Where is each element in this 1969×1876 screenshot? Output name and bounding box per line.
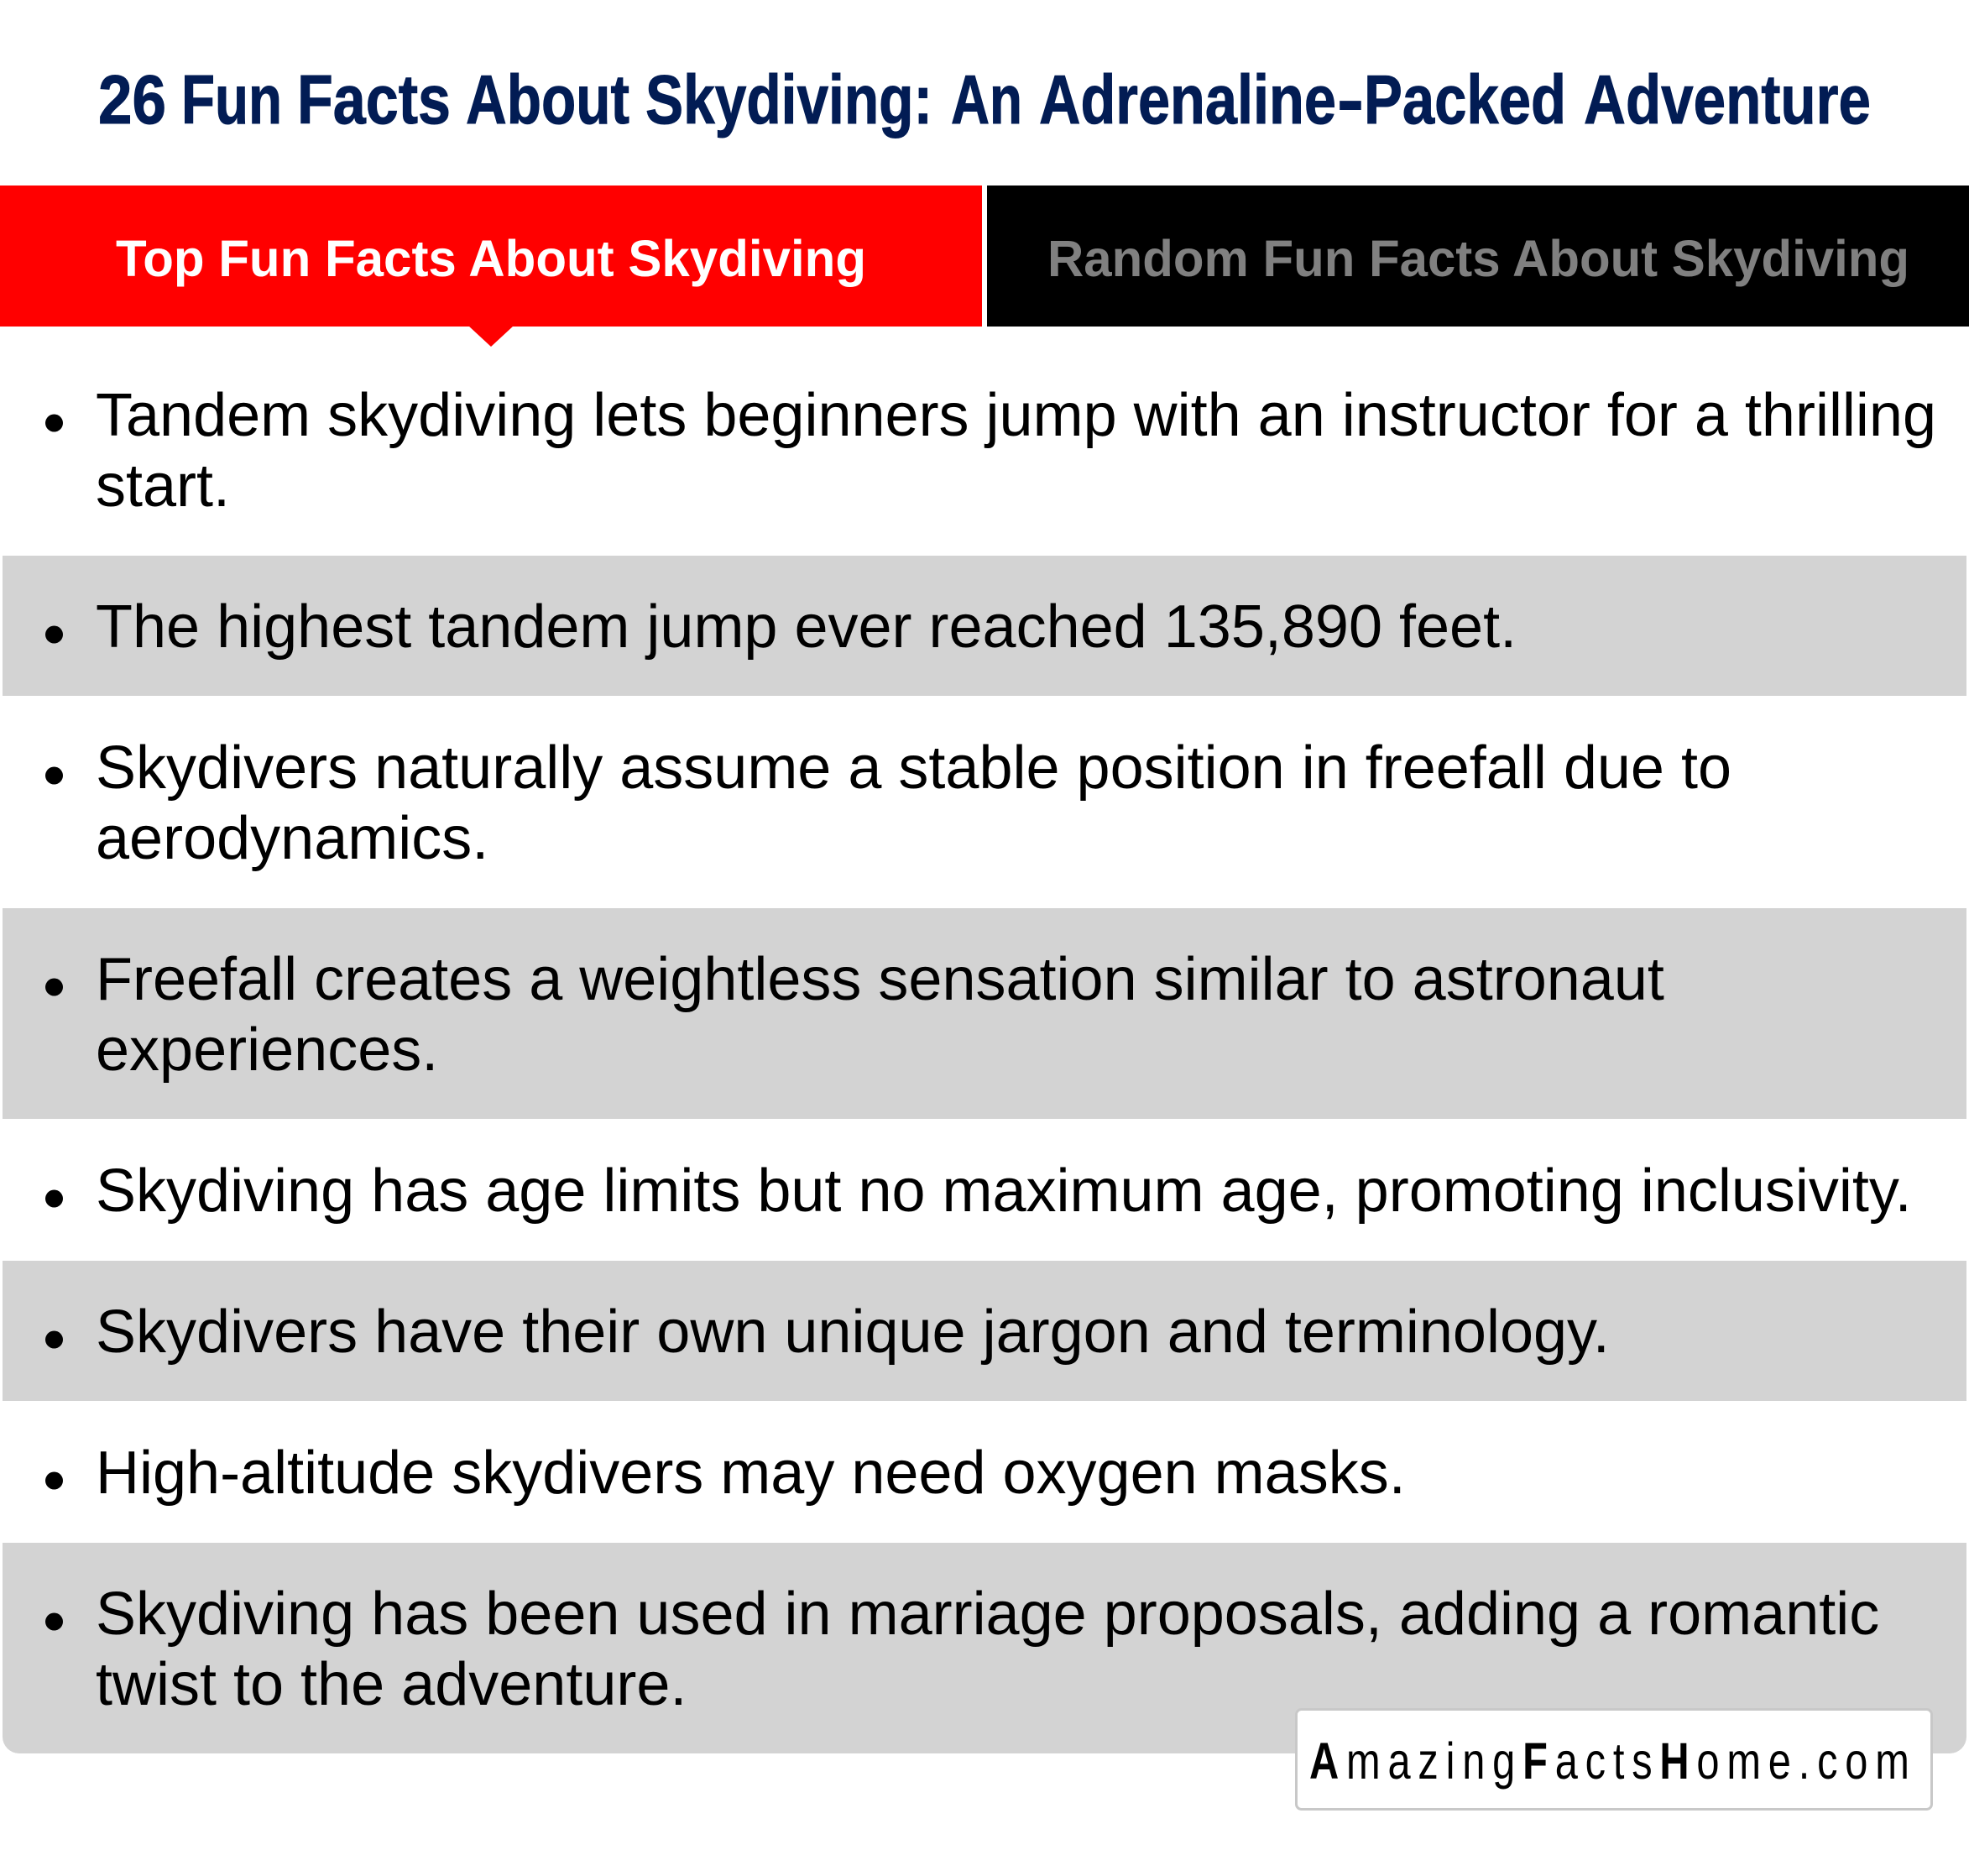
fact row 6: Skydivers have their own unique jargon and terminology. <box>96 1299 1610 1366</box>
tab: random fun facts (inactive) <box>987 186 1969 327</box>
title: - <box>1337 60 1364 138</box>
title: About <box>466 60 629 138</box>
fact row 4 <box>3 908 1966 1119</box>
fact row 8: Skydiving has been used in marriage proposals, adding a romantic <box>96 1581 1879 1648</box>
fact row 1 <box>45 382 1936 520</box>
fact row 3 <box>45 734 1731 872</box>
tab: top fun facts (active): Top Fun Facts About Skydiving <box>116 230 866 287</box>
fact row 4: experiences. <box>96 1016 438 1084</box>
title: An <box>951 60 1022 138</box>
watermark: AmazingFactsHome.com <box>1296 1709 1932 1810</box>
fact row 7: High-altitude skydivers may need oxygen masks. <box>96 1440 1406 1507</box>
title: Facts <box>297 60 451 138</box>
watermark: AmazingFactsHome.com: AmazingFactsHome.com <box>1309 1732 1917 1790</box>
title: Packed <box>1364 60 1566 138</box>
title: Adrenaline <box>1039 60 1336 138</box>
fact row 8: twist to the adventure. <box>96 1651 687 1718</box>
fact row 3: Skydivers naturally assume a stable position in freefall due to <box>96 734 1731 802</box>
fact row 2: The highest tandem jump ever reached 135,890 feet. <box>96 593 1517 661</box>
fact row 5: Skydiving has age limits but no maximum age, promoting inclusivity. <box>96 1157 1912 1225</box>
fact row 1: Tandem skydiving lets beginners jump with an instructor for a thrilling <box>96 382 1936 449</box>
fact row 4: Freefall creates a weightless sensation similar to astronaut <box>96 946 1664 1013</box>
fact row 2 <box>3 556 1966 696</box>
fact row 6 <box>3 1261 1966 1401</box>
tab: random fun facts (inactive): Random Fun Facts About Skydiving <box>1047 230 1909 287</box>
title: Adventure <box>1584 60 1871 138</box>
title: Fun <box>181 60 282 138</box>
fact row 1: start. <box>96 452 230 520</box>
title: 26 <box>98 60 166 138</box>
fact row 8 <box>3 1543 1966 1753</box>
fact row 3: aerodynamics. <box>96 805 488 872</box>
title: Skydiving: <box>645 60 932 138</box>
tab: top fun facts (active) <box>0 186 982 347</box>
